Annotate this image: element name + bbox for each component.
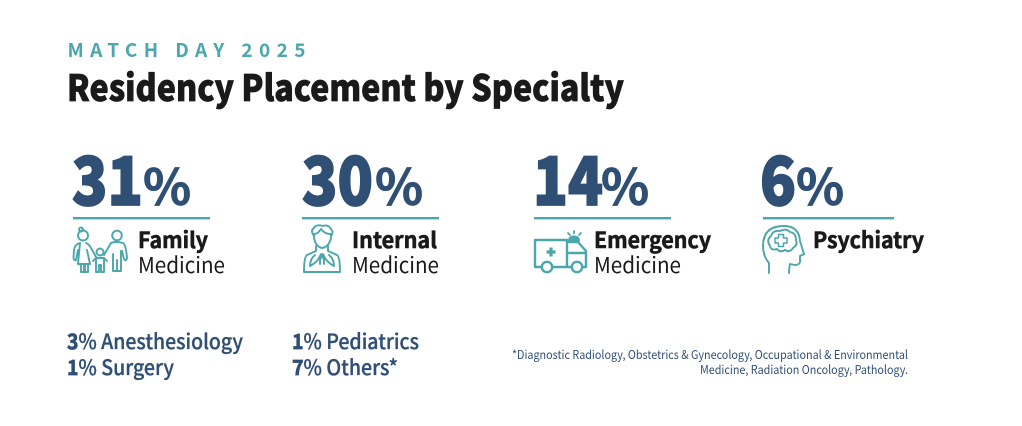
- other specialties: column 1: 1% Surgery: [67, 352, 175, 382]
- value 30%: %: [375, 148, 423, 220]
- label: Internal: [352, 223, 437, 255]
- value 6%: 6: [760, 128, 796, 225]
- footnote: [512, 346, 908, 378]
- other specialties: column 2: 7% Others*: [292, 352, 398, 382]
- other specialties: column 1: [67, 326, 244, 382]
- label: [594, 223, 711, 280]
- other specialties: column 2: [292, 326, 419, 382]
- value 30%: [302, 128, 423, 225]
- eyebrow: match day: MATCH DAY 2025: [68, 36, 306, 63]
- icon: ambulance: [535, 231, 586, 272]
- label: [352, 223, 439, 280]
- label: Medicine: [352, 248, 439, 280]
- label: Family: [138, 223, 208, 255]
- other specialties: column 2: 1% Pediatrics: [292, 326, 419, 356]
- label: Medicine: [594, 248, 681, 280]
- footnote: *Diagnostic Radiology, Obstetrics & Gynecology, Occupational & Environmental: [512, 346, 908, 363]
- stat: psychiatry: [760, 128, 924, 273]
- value 31%: %: [143, 148, 191, 220]
- stat: internal medicine: [302, 128, 439, 280]
- icon: head with brain: [763, 226, 804, 273]
- other specialties: column 1: 3% Anesthesiology: [67, 326, 244, 356]
- value 31%: [72, 128, 191, 225]
- value 6%: %: [796, 148, 844, 220]
- icon: doctor: [304, 225, 340, 272]
- icon: family: [74, 228, 127, 272]
- value 14%: 14: [533, 128, 603, 225]
- value 31%: 31: [72, 128, 143, 225]
- label: [138, 223, 225, 280]
- stat: family medicine: [72, 128, 225, 280]
- stat: emergency medicine: [533, 128, 711, 280]
- footnote: Medicine, Radiation Oncology, Pathology.: [700, 361, 908, 378]
- label: Emergency: [594, 223, 711, 255]
- title: Residency Placement by Specialty: [67, 60, 624, 112]
- value 30%: 30: [302, 128, 373, 225]
- label: Psychiatry: [813, 223, 924, 255]
- label: Medicine: [138, 248, 225, 280]
- value 6%: [760, 128, 844, 225]
- value 14%: %: [601, 148, 649, 220]
